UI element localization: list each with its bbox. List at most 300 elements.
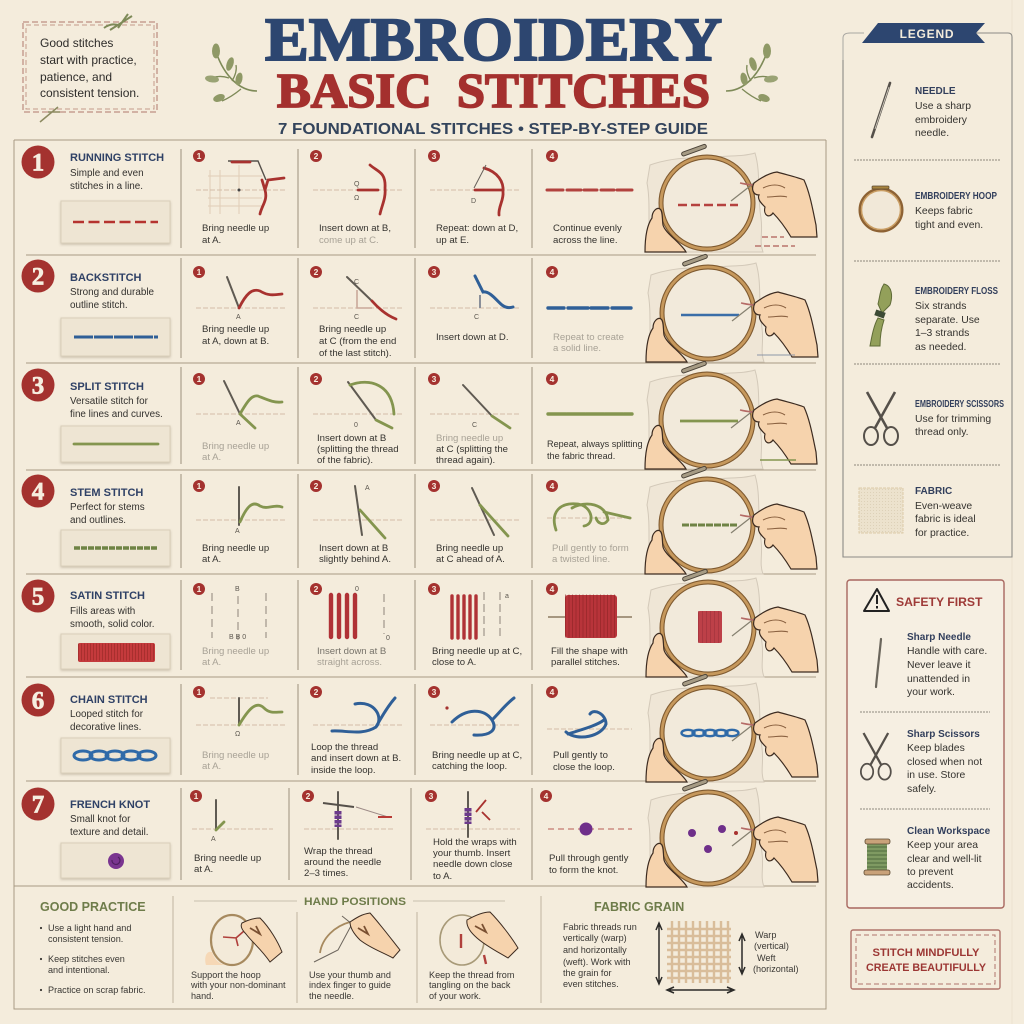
step 1: at A. — [202, 761, 221, 772]
step 4: Fill the shape with — [551, 646, 628, 657]
badge 6: 6 — [32, 688, 44, 714]
step 1: Bring needle up — [194, 853, 261, 864]
step 3: a — [505, 593, 509, 600]
panel: hand positions — [190, 896, 518, 1001]
legend: needle: embroidery — [915, 115, 968, 126]
safety: sharp scissors: Sharp Scissors — [907, 729, 980, 740]
step 3: Bring needle up at C, — [432, 750, 522, 761]
hand illustration 3: of your work. — [429, 991, 481, 1001]
step 1: at A. — [202, 554, 221, 565]
step 4: 4 — [550, 151, 555, 161]
badge 7 — [22, 788, 54, 820]
heading: good practice: GOOD PRACTICE — [40, 900, 146, 914]
safety: sharp scissors: Keep blades — [907, 743, 965, 754]
callout: practice quote: start with practice, — [40, 53, 137, 67]
hoop scene — [645, 144, 817, 252]
bullet list: consistent tension. — [48, 934, 123, 944]
step 3 — [428, 150, 520, 246]
step 4 — [546, 150, 632, 246]
swatch — [61, 201, 170, 243]
step 2 — [302, 790, 393, 879]
description: outline stitch. — [70, 300, 128, 311]
grain description: (weft). Work with — [563, 957, 631, 967]
step 2: straight across. — [317, 657, 382, 668]
heading: satin stitch: SATIN STITCH — [70, 590, 145, 602]
grain description: and horizontally — [563, 945, 627, 955]
step 3 — [428, 480, 520, 565]
description — [70, 502, 145, 526]
safety: clean workspace: Keep your area — [907, 840, 978, 851]
description: Perfect for stems — [70, 502, 145, 513]
step 4 — [546, 266, 631, 354]
description: texture and detail. — [70, 827, 149, 838]
step 4: Pull gently to — [553, 750, 608, 761]
legend banner: LEGEND — [900, 27, 954, 41]
heading: hand positions: HAND POSITIONS — [304, 896, 406, 908]
grain description — [563, 922, 637, 989]
panel: chain stitch — [22, 674, 818, 782]
callout: practice quote: Good stitches — [40, 36, 113, 50]
step 2: 0 — [386, 635, 390, 642]
step 1: A — [235, 528, 240, 535]
bullet list: Keep stitches even — [48, 954, 125, 964]
badge 4 — [22, 474, 54, 508]
step 3: needle down close — [433, 859, 512, 870]
step 2: A — [365, 485, 370, 492]
hand illustration 3 — [429, 912, 518, 1001]
safety: sharp scissors: closed when not — [907, 757, 982, 768]
step 4 — [546, 686, 632, 773]
step 4: close the loop. — [553, 762, 615, 773]
badge 1 — [22, 146, 54, 178]
legend: hoop: Keeps fabric — [915, 206, 973, 217]
step 4 — [546, 373, 643, 461]
step 1 — [190, 790, 273, 875]
grain description: Fabric threads run — [563, 922, 637, 932]
step 1: at A. — [202, 235, 221, 246]
panel: legend — [843, 23, 1012, 557]
step 1: Bring needle up — [202, 750, 269, 761]
step 4: 4 — [550, 374, 555, 384]
warp and weft labels: (vertical) — [754, 941, 789, 951]
step 4: Continue evenly — [553, 223, 622, 234]
safety: sharp scissors — [861, 729, 982, 795]
step 3 — [428, 373, 520, 466]
step 1: 1 — [197, 481, 202, 491]
description: Looped stitch for — [70, 709, 144, 720]
panel: stem stitch — [22, 466, 817, 574]
badge 4: 4 — [32, 478, 45, 506]
badge 2: 2 — [32, 264, 44, 290]
legend: hoop: tight and even. — [915, 220, 983, 231]
step 1 — [193, 150, 285, 246]
swatch — [61, 843, 170, 878]
hoop scene — [646, 674, 818, 782]
step 2: Insert down at B — [319, 543, 388, 554]
grain description: even stitches. — [563, 979, 619, 989]
step 1: A — [236, 420, 241, 427]
step 1: Bring needle up — [202, 223, 269, 234]
step 3: Bring needle up — [436, 433, 503, 444]
step 1: B B 0 — [229, 634, 246, 641]
step 3: thread again). — [436, 455, 495, 466]
step 1 — [193, 373, 285, 463]
description: Versatile stitch for — [70, 396, 149, 407]
callout: stitch mindfully — [851, 930, 1000, 989]
legend: needle: needle. — [915, 128, 949, 139]
step 2: and insert down at B. — [311, 753, 401, 764]
warp and weft labels: (horizontal) — [753, 964, 798, 974]
legend: needle: NEEDLE — [915, 86, 956, 97]
legend: floss: Six strands — [915, 301, 966, 312]
step 4: across the line. — [553, 235, 618, 246]
callout: practice quote: consistent tension. — [40, 86, 139, 100]
hoop scene — [646, 569, 818, 677]
legend: fabric — [859, 486, 976, 539]
step 3: Insert down at D. — [436, 332, 509, 343]
title: EMBROIDERY — [265, 7, 722, 74]
hand illustration 1 — [190, 915, 286, 1001]
step 3 — [428, 686, 522, 772]
step 3 — [428, 583, 522, 668]
step 3 — [425, 790, 520, 882]
icon: warning triangle — [864, 589, 889, 611]
swatch — [61, 318, 170, 356]
safety: clean workspace: Clean Workspace — [907, 826, 991, 837]
step 3: 3 — [432, 267, 437, 277]
step 1: Bring needle up — [202, 646, 269, 657]
safety: clean workspace — [864, 826, 991, 891]
hand illustration 3: Keep the thread from — [429, 970, 514, 980]
step 3: catching the loop. — [432, 761, 507, 772]
legend: needle: Use a sharp — [915, 101, 971, 112]
step 2 — [310, 266, 402, 359]
step 3: D — [471, 198, 476, 205]
grain description: vertically (warp) — [563, 933, 627, 943]
legend: scissors: thread only. — [915, 427, 969, 438]
step 2: slightly behind A. — [319, 554, 391, 565]
hoop scene — [646, 779, 818, 887]
step 2: come up at C. — [319, 235, 379, 246]
step 4: a solid line. — [553, 343, 601, 354]
description: Strong and durable — [70, 287, 155, 298]
step 2 — [310, 373, 402, 466]
safety heading: SAFETY FIRST — [896, 595, 983, 609]
step 3: Bring needle up at C, — [432, 646, 522, 657]
description: stitches in a line. — [70, 181, 143, 192]
heading: backstitch: BACKSTITCH — [70, 272, 142, 284]
step 2: C — [354, 314, 359, 321]
step 3: to A. — [433, 871, 452, 882]
heading: fabric grain: FABRIC GRAIN — [594, 900, 684, 914]
step 2: 2 — [314, 687, 319, 697]
swatch — [61, 738, 170, 773]
badge 5 — [22, 580, 54, 612]
panel: good practice — [40, 896, 541, 1003]
bullet list: Practice on scrap fabric. — [48, 985, 146, 995]
step 4 — [546, 480, 632, 565]
step 3: 3 — [432, 584, 437, 594]
step 1: at A. — [202, 452, 221, 463]
safety: clean workspace: clear and well-lit — [907, 854, 982, 865]
step 1: 1 — [197, 267, 202, 277]
step 3: Hold the wraps with — [433, 837, 517, 848]
heading: split stitch: SPLIT STITCH — [70, 381, 144, 393]
step 1: 1 — [197, 374, 202, 384]
legend: needle — [872, 83, 971, 139]
step 4: Pull gently to form — [552, 543, 629, 554]
step 3: C — [472, 422, 477, 429]
badge 1: 1 — [32, 150, 44, 176]
panel: backstitch — [22, 254, 818, 362]
legend: scissors — [864, 392, 1004, 445]
step 1: Bring needle up — [202, 324, 269, 335]
step 4: 4 — [550, 584, 555, 594]
step 2 — [310, 480, 402, 565]
swatch — [61, 530, 170, 566]
step 2: of the fabric). — [317, 455, 373, 466]
step 2: Ω — [354, 195, 359, 202]
legend: floss — [870, 284, 998, 353]
step 2 — [310, 583, 390, 668]
safety: clean workspace: to prevent — [907, 867, 953, 878]
legend: fabric: FABRIC — [915, 486, 952, 497]
description — [70, 709, 144, 733]
panel: fabric grain — [563, 900, 798, 993]
safety: sharp needle: your work. — [907, 687, 955, 698]
step 2: (splitting the thread — [317, 444, 399, 455]
step 3: 3 — [432, 687, 437, 697]
step 2: Insert down at B — [317, 646, 386, 657]
step 1 — [193, 266, 285, 347]
bullet list: and intentional. — [48, 965, 110, 975]
legend: fabric: Even-weave — [915, 501, 972, 512]
description — [70, 396, 163, 420]
callout: stitch mindfully: CREATE BEAUTIFULLY — [866, 962, 987, 974]
step 4: 4 — [550, 687, 555, 697]
step 3: Bring needle up — [436, 543, 503, 554]
badge 3: 3 — [32, 372, 44, 400]
step 2: 2 — [314, 584, 319, 594]
step 2: 0 — [355, 586, 359, 593]
step 1: Bring needle up — [202, 441, 269, 452]
step 4: parallel stitches. — [551, 657, 620, 668]
description: and outlines. — [70, 515, 126, 526]
step 4: Repeat to create — [553, 332, 624, 343]
panel: french knot — [22, 779, 818, 887]
step 2: Q — [354, 181, 360, 188]
swatch — [61, 426, 170, 462]
step 2: of the last stitch). — [319, 348, 392, 359]
step 4: 4 — [550, 267, 555, 277]
hoop scene — [645, 466, 817, 574]
callout: practice quote: patience, and — [40, 70, 112, 84]
step 1: Bring needle up — [202, 543, 269, 554]
description — [70, 287, 155, 311]
step 2: Insert down at B — [317, 433, 386, 444]
step 4: a twisted line. — [552, 554, 610, 565]
step 3: at C ahead of A. — [436, 554, 505, 565]
step 2: 2 — [314, 267, 319, 277]
step 2 — [310, 150, 402, 246]
step 3: Repeat: down at D, — [436, 223, 518, 234]
hand illustration 1: hand. — [191, 991, 214, 1001]
step 2: Wrap the thread — [304, 846, 373, 857]
callout: practice quote — [23, 14, 157, 122]
step 1 — [193, 583, 269, 668]
hand illustration 2: Use your thumb and — [309, 970, 391, 980]
step 1: at A. — [194, 864, 213, 875]
callout: stitch mindfully: STITCH MINDFULLY — [872, 947, 980, 959]
step 4 — [540, 790, 632, 876]
legend: floss: as needed. — [915, 342, 966, 353]
badge 7: 7 — [32, 792, 44, 818]
legend: floss: 1–3 strands — [915, 328, 969, 339]
hoop scene — [646, 254, 818, 362]
step 4: Repeat, always splitting — [547, 439, 643, 449]
step 2 — [310, 686, 402, 776]
safety: sharp needle: unattended in — [907, 674, 970, 685]
description: Fills areas with — [70, 606, 135, 617]
bullet list: Use a light hand and — [48, 923, 131, 933]
description — [70, 606, 155, 630]
badge 2 — [22, 260, 54, 292]
step 3: 3 — [432, 374, 437, 384]
step 1: A — [236, 314, 241, 321]
weave grid — [667, 921, 731, 983]
step 1: 1 — [197, 687, 202, 697]
bullet list — [40, 923, 146, 995]
hand illustration 3: tangling on the back — [429, 980, 511, 990]
hand illustration 1: Support the hoop — [191, 970, 261, 980]
description: fine lines and curves. — [70, 409, 163, 420]
description: smooth, solid color. — [70, 619, 155, 630]
safety: sharp needle: Never leave it — [907, 660, 971, 671]
step 4: the fabric thread. — [547, 451, 615, 461]
title — [265, 7, 722, 138]
step 1: at A, down at B. — [202, 336, 269, 347]
legend: scissors: Use for trimming — [915, 414, 991, 425]
safety: sharp scissors: safely. — [907, 784, 936, 795]
icon: left sprig — [205, 44, 257, 103]
step 2: Loop the thread — [311, 742, 378, 753]
main frame and row rules — [14, 140, 826, 1009]
description: decorative lines. — [70, 722, 141, 733]
step 3: 3 — [432, 151, 437, 161]
safety: sharp scissors: in use. Store — [907, 770, 966, 781]
step 4 — [546, 583, 632, 668]
step 1: 1 — [197, 584, 202, 594]
legend banner — [862, 23, 985, 43]
legend: fabric: fabric is ideal — [915, 514, 976, 525]
description — [70, 168, 144, 192]
hand illustration 1: with your non-dominant — [190, 980, 286, 990]
badge 3 — [22, 368, 54, 402]
step 2: Insert down at B, — [319, 223, 391, 234]
step 1: Ω — [235, 731, 240, 738]
description: Simple and even — [70, 168, 144, 179]
heading: french knot: FRENCH KNOT — [70, 799, 150, 811]
safety: sharp needle: Sharp Needle — [907, 632, 971, 643]
step 3: at C (splitting the — [436, 444, 508, 455]
step 3: 3 — [429, 791, 434, 801]
hand illustration 2 — [309, 913, 400, 1001]
step 2: C — [354, 279, 359, 286]
step 4: to form the knot. — [549, 865, 618, 876]
title: 7 FOUNDATIONAL STITCHES • STEP-BY-STEP GUIDE — [278, 121, 708, 138]
legend: hoop — [860, 186, 997, 231]
description: Small knot for — [70, 814, 131, 825]
step 2: 2–3 times. — [304, 868, 348, 879]
grain description: the grain for — [563, 968, 612, 978]
heading: running stitch: RUNNING STITCH — [70, 152, 164, 164]
step 1 — [193, 480, 285, 565]
warp and weft labels: Weft — [757, 953, 776, 963]
step 3: your thumb. Insert — [433, 848, 511, 859]
hand illustration 2: index finger to guide — [309, 980, 391, 990]
step 4: 4 — [550, 481, 555, 491]
panel: running stitch — [22, 144, 817, 252]
legend: floss: EMBROIDERY FLOSS — [915, 286, 998, 297]
grain arrows — [656, 923, 745, 993]
title: BASIC STITCHES — [277, 63, 710, 118]
step 1: 1 — [197, 151, 202, 161]
step 2: at C (from the end — [319, 336, 396, 347]
badge 5: 5 — [32, 584, 44, 610]
step 4: 4 — [544, 791, 549, 801]
step 2: inside the loop. — [311, 765, 376, 776]
step 4: Pull through gently — [549, 853, 629, 864]
swatch — [61, 634, 170, 669]
step 1: at A. — [202, 657, 221, 668]
hoop scene — [645, 361, 817, 469]
step 2: 2 — [306, 791, 311, 801]
step 2: 2 — [314, 151, 319, 161]
heading: chain stitch: CHAIN STITCH — [70, 694, 148, 706]
icon: right sprig — [726, 44, 778, 103]
panel: satin stitch — [22, 569, 818, 677]
panel: safety first — [847, 580, 1004, 908]
step 2: around the needle — [304, 857, 381, 868]
step 1 — [193, 686, 285, 772]
step 2: 0 — [354, 422, 358, 429]
badge 6 — [22, 684, 54, 716]
safety: sharp needle: Handle with care. — [907, 646, 987, 657]
warp and weft labels: Warp — [755, 930, 776, 940]
step 3: up at E. — [436, 235, 469, 246]
step 2: 2 — [314, 481, 319, 491]
step 2: Bring needle up — [319, 324, 386, 335]
step 1: A — [211, 836, 216, 843]
legend: fabric: for practice. — [915, 528, 969, 539]
description — [70, 814, 149, 838]
warp and weft labels — [753, 930, 798, 974]
hand illustration 2: the needle. — [309, 991, 354, 1001]
safety: clean workspace: accidents. — [907, 880, 954, 891]
legend: floss: separate. Use — [915, 315, 980, 326]
step 3 — [428, 266, 520, 343]
step 3: 3 — [432, 481, 437, 491]
step 3: close to A. — [432, 657, 476, 668]
safety: sharp needle — [876, 632, 987, 698]
legend: hoop: EMBROIDERY HOOP — [915, 191, 997, 202]
panel: split stitch — [22, 361, 817, 469]
step 2: 2 — [314, 374, 319, 384]
step 3: C — [474, 314, 479, 321]
heading: stem stitch: STEM STITCH — [70, 487, 143, 499]
step 1: 1 — [194, 791, 199, 801]
step 1: B — [235, 586, 240, 593]
